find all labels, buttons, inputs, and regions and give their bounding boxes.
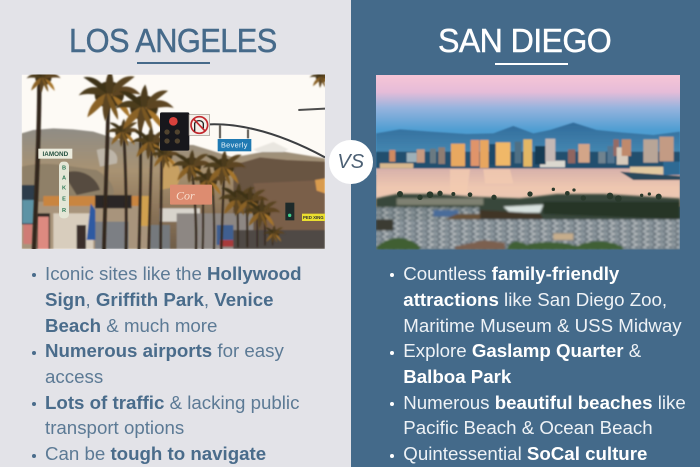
bay water (376, 168, 680, 207)
bullet list: Los Angeles: transport options (45, 417, 184, 438)
pink script sign (170, 185, 212, 205)
far shore with palms (376, 192, 680, 220)
no U-turn sign (189, 115, 210, 135)
signal arm (210, 124, 325, 157)
skyline (389, 150, 395, 162)
bullet list: San Diego: Explore Gaslamp Quarter & (403, 340, 641, 361)
bullet list: San Diego: attractions like San Diego Zoo, (403, 289, 667, 310)
bullet list: Los Angeles: Numerous airports for easy (45, 340, 284, 361)
bullet: Gaslamp Quarter (390, 340, 641, 387)
Bakery vertical sign: R (62, 208, 66, 214)
Bakery vertical sign: K (62, 185, 67, 191)
bullet list: San Diego: Pacific Beach & Ocean Beach (403, 417, 653, 438)
VS badge (329, 140, 372, 184)
heading underline (137, 62, 210, 64)
bullet list: San Diego: Maritime Museum & USS Midway (403, 315, 682, 336)
bullet: beaches (390, 392, 686, 438)
palm trunks (34, 80, 273, 249)
panel: Los Angeles (22, 28, 325, 464)
palm crowns (26, 64, 334, 243)
waterfront strip (376, 152, 680, 168)
bullet: airports (32, 340, 284, 387)
bullet: iconic sites (32, 263, 302, 336)
VS badge: VS (337, 151, 364, 173)
bullet list: Los Angeles: Sign, Griffith Park, Venice (45, 289, 274, 310)
traffic light (160, 112, 189, 151)
bullet list: San Diego: Quintessential SoCal culture (403, 443, 647, 464)
bullet: family attractions (390, 263, 682, 336)
photo: San Diego skyline and harbor (376, 75, 680, 250)
bullet list: Los Angeles: Iconic sites like the Hollywood (45, 263, 302, 284)
photo: Los Angeles street with palm trees (22, 74, 325, 249)
bullet list: Los Angeles: Can be tough to navigate (45, 443, 266, 464)
bullet list: Los Angeles: Beach & much more (45, 315, 217, 336)
Diamond sign (38, 149, 72, 159)
pink script sign: Cor (176, 188, 195, 202)
Beverly street sign: Beverly (221, 141, 248, 150)
shoreline palms (397, 188, 662, 202)
Diamond sign: IAMOND (42, 151, 69, 158)
panel: San Diego (351, 0, 700, 467)
bullet list: San Diego (390, 263, 686, 464)
Bakery vertical sign: A (62, 175, 66, 181)
heading: San Diego: SAN DIEGO (438, 22, 611, 58)
bullet list: Los Angeles: access (45, 366, 103, 387)
bullet list: Los Angeles (32, 263, 302, 464)
small signal and yellow sign: PED XING (303, 215, 324, 220)
bullet: traffic (32, 392, 299, 438)
buildings (22, 202, 148, 249)
Bakery vertical sign (59, 162, 69, 218)
Beverly street sign (218, 139, 251, 151)
small signal and yellow sign (285, 203, 325, 221)
heading underline (495, 63, 568, 65)
Bakery vertical sign: B (62, 165, 66, 171)
marina (376, 219, 680, 250)
Bakery vertical sign: E (62, 197, 66, 203)
hills (22, 128, 325, 249)
bullet list: San Diego: Countless family-friendly (403, 263, 619, 284)
bullet list: Los Angeles: Lots of traffic & lacking public (45, 392, 299, 413)
bullet list: San Diego: Balboa Park (403, 366, 511, 387)
heading: Los Angeles: LOS ANGELES (69, 22, 277, 58)
mountains (376, 122, 680, 152)
bullet list: San Diego: Numerous beautiful beaches like (403, 392, 686, 413)
